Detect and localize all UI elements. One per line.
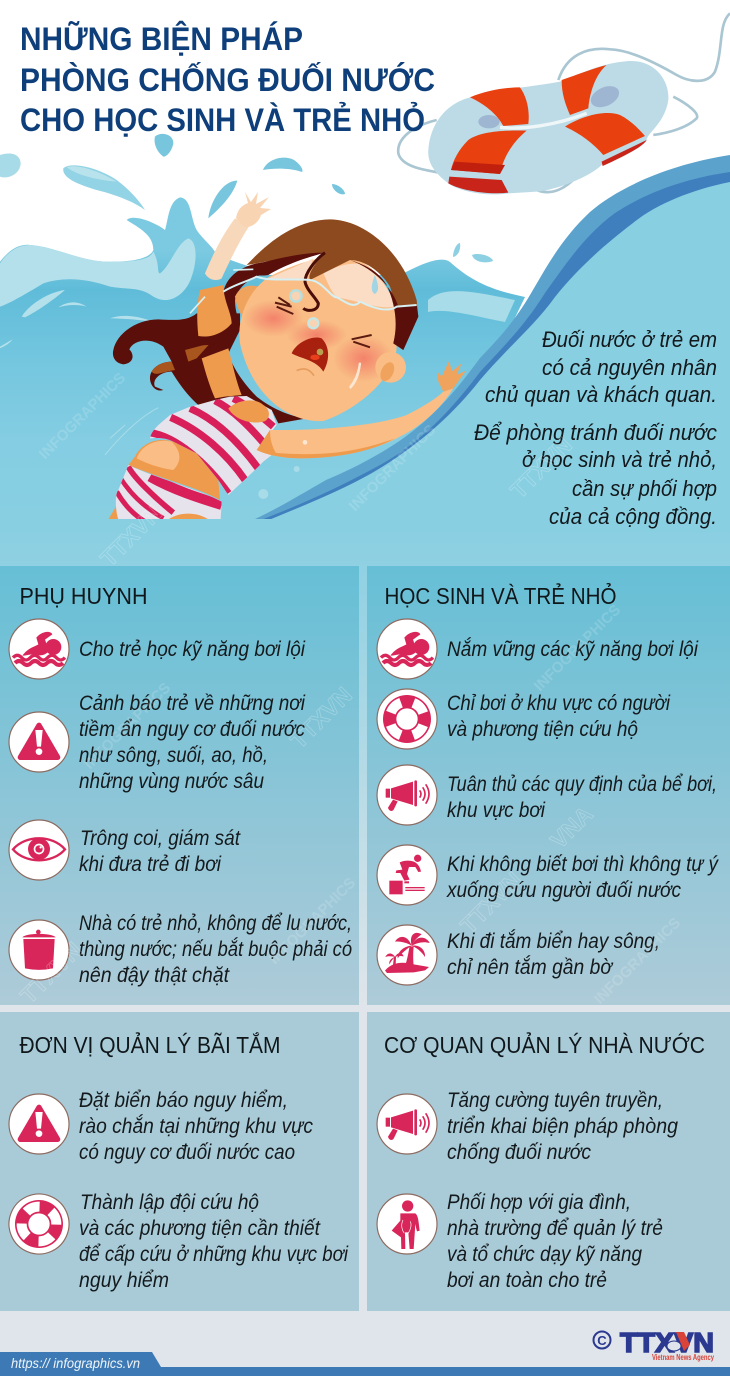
item: cover containers: thùng nước; nếu bắt buộc phải có: [79, 938, 352, 961]
item: public awareness: triển khai biện pháp phòng: [447, 1115, 678, 1138]
water splash: [0, 197, 260, 520]
heading: parents: PHỤ HUYNH: [20, 583, 148, 609]
watermarks: INFOGRAPHICS: [81, 679, 174, 773]
water drops: [0, 134, 493, 262]
item: cover containers: Nhà có trẻ nhỏ, không để lu nước,: [79, 912, 352, 935]
intro text: Đuối nước ở trẻ em: [542, 327, 717, 352]
heading: students: HỌC SINH VÀ TRẺ NHỎ: [384, 581, 616, 609]
item: warning signs: có nguy cơ đuối nước cao: [79, 1141, 295, 1164]
watermarks: TTXVN: [455, 867, 527, 939]
panel: parents: [0, 566, 359, 1005]
watermarks: INFOGRAPHICS: [36, 369, 129, 463]
right ear: [350, 352, 406, 388]
watermarks: INFOGRAPHICS: [531, 601, 624, 695]
item: swimming skills: Cho trẻ học kỹ năng bơi lội: [79, 638, 306, 661]
logo: TTXVN: C: [597, 1333, 607, 1348]
item: coordinate with families: nhà trường để quản lý trẻ: [447, 1217, 663, 1240]
panel: state agencies: [367, 1012, 730, 1311]
body and swimsuit: [105, 361, 466, 523]
footer bar: [0, 1352, 730, 1376]
item: supervise: [9, 820, 241, 880]
watermarks: TTXVN: [285, 682, 357, 754]
item: rescue team: [0, 1185, 349, 1292]
intro text: chủ quan và khách quan.: [485, 382, 717, 407]
head: [190, 219, 418, 421]
item: master swimming: [377, 619, 699, 679]
title: NHỮNG BIỆN PHÁP: [20, 21, 303, 57]
item: public awareness: Tăng cường tuyên truyền,: [447, 1089, 663, 1112]
illustration: drowning child and water: [0, 134, 525, 523]
item: obey rules: [377, 765, 717, 825]
title: CHO HỌC SINH VÀ TRẺ NHỎ: [20, 102, 425, 138]
raised arm: [205, 192, 271, 280]
item: stay near shore: chỉ nên tắm gần bờ: [447, 956, 614, 979]
intro text: cần sự phối hợp: [572, 476, 717, 501]
watermarks: INFOGRAPHICS: [591, 914, 684, 1008]
watermarks: INFOGRAPHICS: [346, 421, 439, 515]
item: warn about danger: như sông, suối, ao, hồ,: [79, 744, 268, 767]
watermarks: TTXVN: [15, 937, 87, 1009]
title: PHÒNG CHỐNG ĐUỐI NƯỚC: [20, 62, 435, 98]
intro text: của cả cộng đồng.: [549, 504, 717, 529]
item: do not attempt rescue: xuống cứu người đuối nước: [446, 879, 681, 902]
item: cover containers: [9, 912, 352, 987]
item: rescue team: để cấp cứu ở những khu vực bơi: [79, 1243, 349, 1266]
item: warning signs: rào chắn tại những khu vực: [79, 1115, 313, 1138]
item: warning signs: [9, 1089, 313, 1164]
watermarks: TTXVN: [505, 432, 577, 504]
title: [20, 21, 435, 138]
item: warn about danger: [9, 692, 306, 793]
item: obey rules: khu vực bơi: [447, 799, 546, 822]
item: swim where rescue exists: và phương tiện cứu hộ: [447, 718, 638, 741]
watermarks: VNA: [545, 801, 598, 854]
intro text: Để phòng tránh đuối nước: [474, 420, 717, 445]
panel: beach management: [0, 1012, 359, 1311]
watermarks: INFOGRAPHICS: [266, 874, 359, 968]
logo: TTXVN: TTXVN: [620, 1327, 714, 1358]
item: supervise: Trông coi, giám sát: [80, 827, 241, 850]
back hair: [113, 313, 307, 423]
intro text: [474, 327, 717, 529]
item: warn about danger: tiềm ẩn nguy cơ đuối nước: [79, 718, 305, 741]
item: public awareness: [377, 1089, 678, 1164]
item: rescue team: Thành lập đội cứu hộ: [80, 1191, 259, 1214]
item: stay near shore: Khi đi tắm biển hay sông,: [447, 930, 660, 953]
item: master swimming: Nắm vững các kỹ năng bơi lội: [447, 638, 699, 661]
item: coordinate with families: và tổ chức dạy kỹ năng: [447, 1243, 642, 1266]
footer bar: https:// infographics.vn: [11, 1355, 140, 1371]
intro text: ở học sinh và trẻ nhỏ,: [522, 447, 717, 472]
item: swim where rescue exists: [377, 689, 671, 749]
item: warn about danger: những vùng nước sâu: [79, 770, 264, 793]
item: coordinate with families: Phối hợp với gia đình,: [447, 1191, 631, 1214]
item: supervise: khi đưa trẻ đi bơi: [79, 853, 222, 876]
item: stay near shore: [377, 925, 660, 985]
item: cover containers: nên đậy thật chặt: [79, 964, 230, 987]
item: warning signs: Đặt biển báo nguy hiểm,: [79, 1089, 288, 1112]
item: swim where rescue exists: Chỉ bơi ở khu vực có người: [447, 692, 671, 715]
heading: beach management: ĐƠN VỊ QUẢN LÝ BÃI TẮM: [20, 1030, 280, 1058]
watermarks: TTXVN: [95, 500, 167, 572]
item: coordinate with families: [377, 1191, 663, 1292]
item: rescue team: nguy hiểm: [79, 1269, 169, 1292]
item: warn about danger: Cảnh báo trẻ về những nơi: [79, 692, 306, 715]
intro text: có cả nguyên nhân: [542, 355, 717, 380]
item: coordinate with families: bơi an toàn cho trẻ: [447, 1269, 607, 1292]
item: do not attempt rescue: [377, 845, 719, 905]
item: rescue team: và các phương tiện cần thiết: [79, 1217, 321, 1240]
icon: life ring: [398, 13, 730, 194]
item: public awareness: chống đuối nước: [447, 1141, 591, 1164]
panel: students and children: [367, 566, 730, 1005]
item: swimming skills: [9, 619, 306, 679]
logo: TTXVN: [594, 1327, 714, 1362]
wave band and text background: [0, 155, 730, 529]
watermarks: [15, 369, 684, 1009]
far water: [260, 260, 525, 516]
